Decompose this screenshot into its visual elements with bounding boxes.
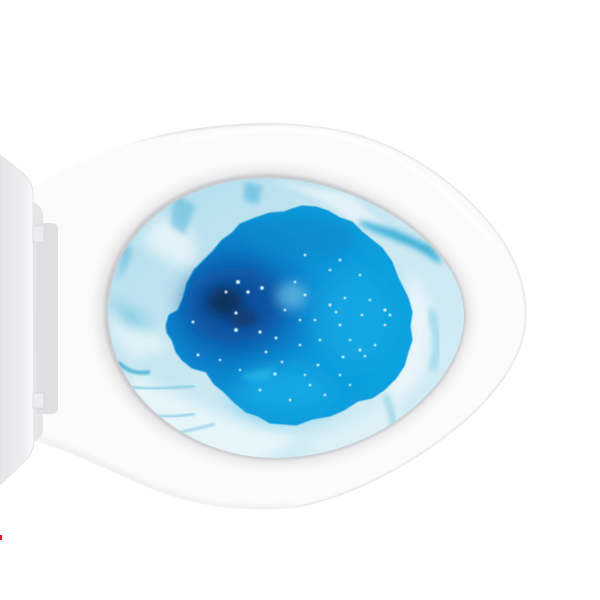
blue flush water: [166, 206, 412, 425]
hinge clip: bottom: [33, 393, 44, 408]
hinge assembly: [33, 202, 58, 442]
hinge clip: top: [33, 226, 44, 242]
toilet rim: [33, 123, 527, 510]
bowl water background with pale streaks: [108, 178, 464, 470]
open toilet seat lid: [0, 155, 34, 485]
pale swirl bands: [108, 180, 440, 470]
illustration: toilet bowl flushing with blue water: [0, 123, 526, 540]
red corner mark: [0, 535, 2, 540]
dark vortex: [185, 267, 285, 343]
lighter foam areas: [235, 218, 393, 414]
bubbles: [192, 254, 391, 401]
